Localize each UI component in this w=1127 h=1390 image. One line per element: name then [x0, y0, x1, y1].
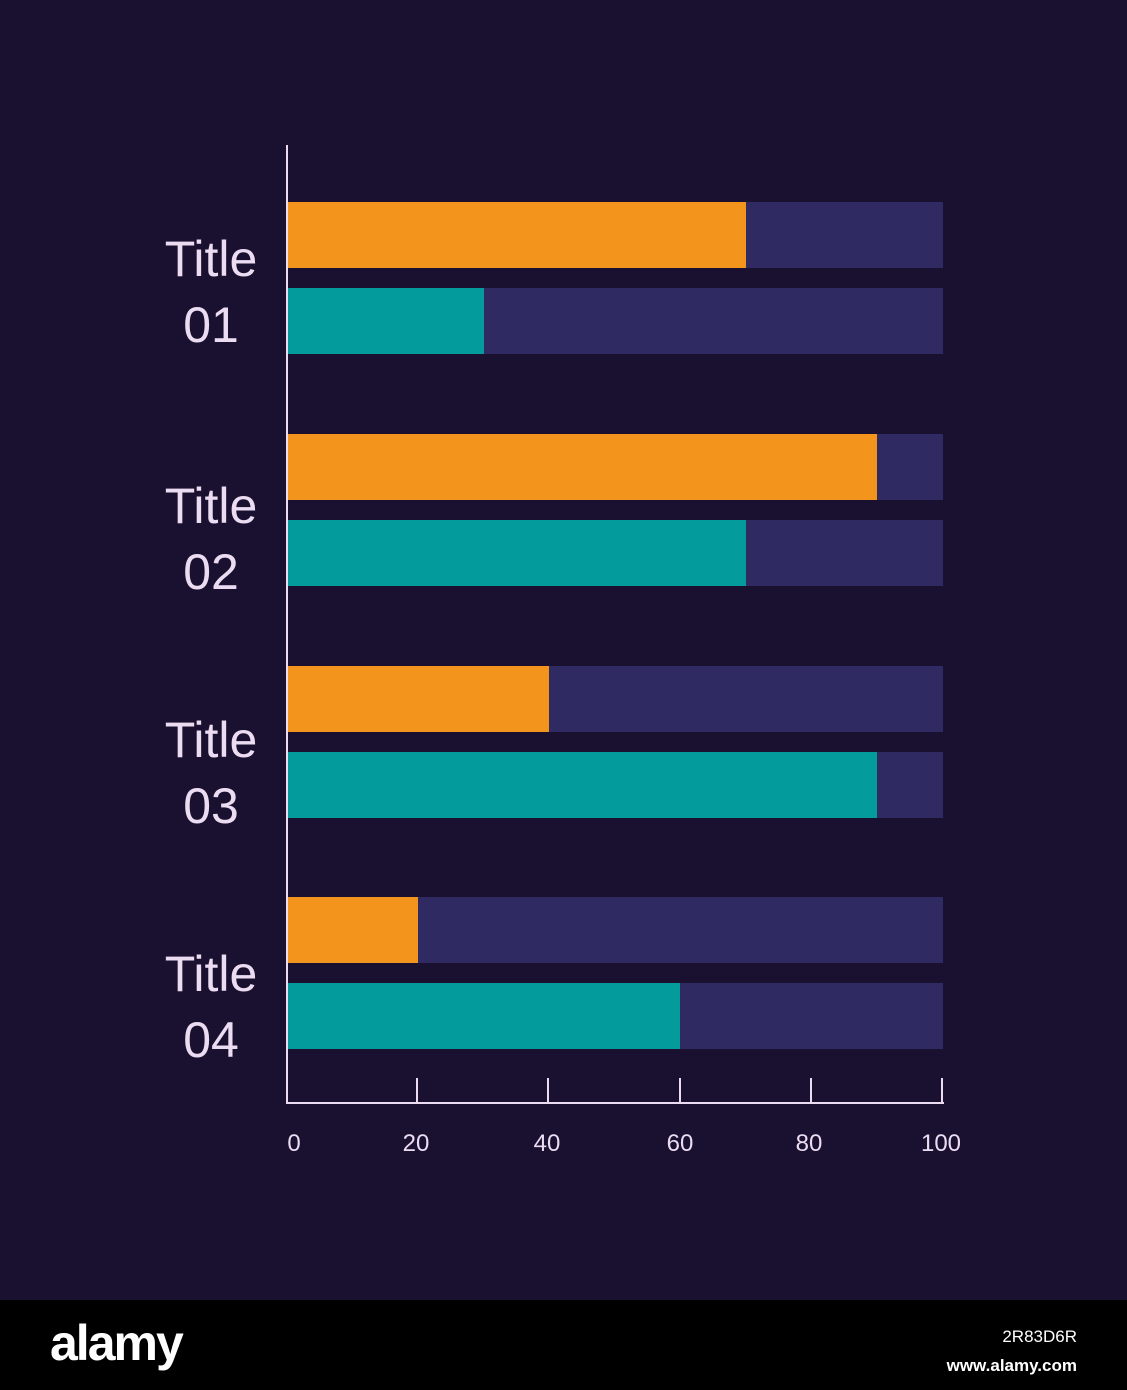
- footer logo: alamy: [50, 1315, 182, 1371]
- footer id: www.alamy.com: [947, 1356, 1077, 1375]
- ticks: 40: [534, 1130, 560, 1157]
- label: Title 01: Title: [165, 231, 257, 287]
- bar 01 teal: [288, 288, 943, 354]
- label: Title 03: Title: [165, 712, 257, 768]
- x axis: [286, 1102, 944, 1104]
- bar 02 teal: [288, 520, 943, 586]
- ticks: 60: [667, 1130, 693, 1157]
- label: Title 01: 01: [183, 297, 239, 353]
- label: Title 02: [165, 478, 257, 600]
- ticks: 80: [796, 1130, 822, 1157]
- label: Title 04: Title: [165, 946, 257, 1002]
- bar 03 orange: [288, 666, 943, 732]
- footer id: 2R83D6R: [1002, 1327, 1077, 1346]
- ticks: 0: [287, 1130, 301, 1157]
- ticks: 20: [403, 1130, 429, 1157]
- label: Title 02: Title: [165, 478, 257, 534]
- ticks: 100: [921, 1130, 961, 1157]
- label: Title 04: [165, 946, 257, 1068]
- bar 04 teal: [288, 983, 943, 1049]
- y axis: [286, 145, 288, 1104]
- label: Title 03: [165, 712, 257, 834]
- label: Title 02: 02: [183, 544, 239, 600]
- bar 01 orange: [288, 202, 943, 268]
- label: Title 01: [165, 231, 257, 353]
- bar 02 orange: [288, 434, 943, 500]
- bar 03 teal: [288, 752, 943, 818]
- label: Title 03: 03: [183, 778, 239, 834]
- footer id: [946, 1327, 1077, 1375]
- footer bar: [0, 1300, 1127, 1390]
- label: Title 04: 04: [183, 1012, 239, 1068]
- bar 04 orange: [288, 897, 943, 963]
